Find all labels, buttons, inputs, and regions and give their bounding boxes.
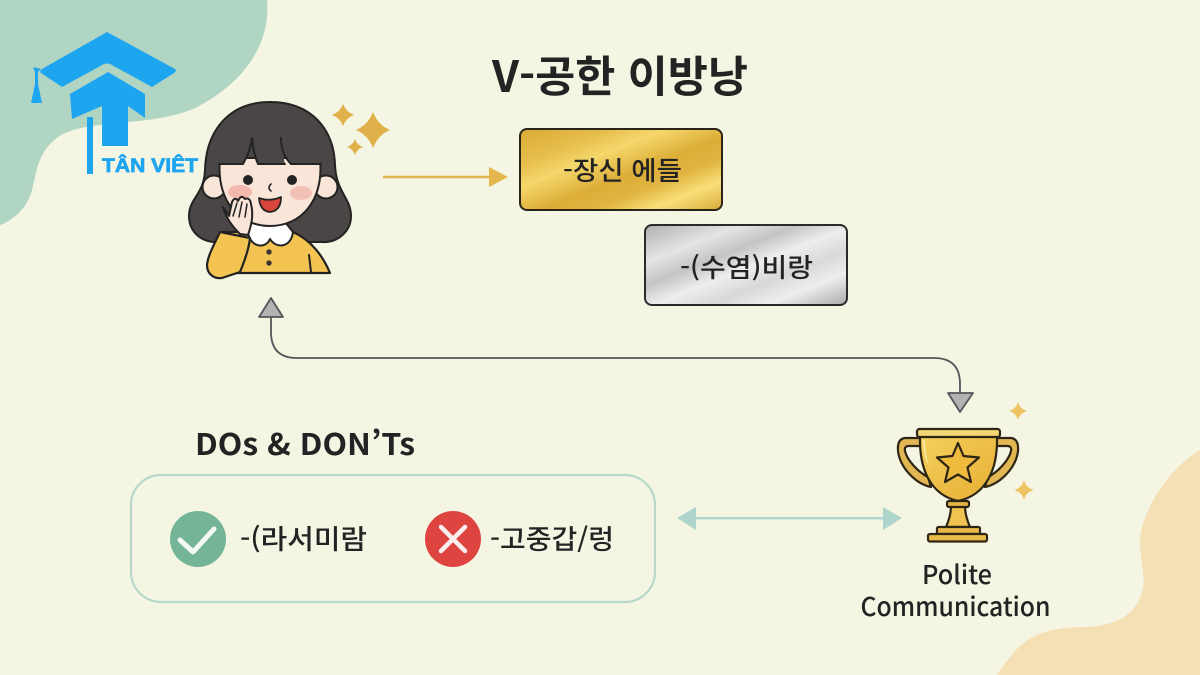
decorative peach blob xyxy=(997,450,1200,675)
face xyxy=(220,158,320,226)
trophy base xyxy=(937,527,980,534)
logo tassel xyxy=(31,67,42,103)
sparkles near girl xyxy=(332,104,390,155)
caption: Polite Communication xyxy=(860,555,1050,624)
silver label box: -(수염)비랑 xyxy=(680,248,813,285)
logo cap xyxy=(40,32,176,87)
trophy star xyxy=(937,443,979,482)
text: do: -(라서미람 xyxy=(240,518,367,557)
ears xyxy=(202,176,338,198)
icon: trophy xyxy=(898,429,1018,542)
cheeks xyxy=(228,185,252,199)
mouth xyxy=(259,197,281,212)
logo text: TÂN VIÊT xyxy=(102,155,198,177)
heading: DOs and DON'Ts: DOs & DON’Ts xyxy=(195,420,415,464)
sweater xyxy=(215,232,330,273)
nose xyxy=(269,184,271,191)
gold label box xyxy=(520,129,722,210)
bangs xyxy=(219,112,321,164)
sweater fold xyxy=(309,255,311,272)
icon: cross xyxy=(425,511,481,567)
logo arrow xyxy=(70,72,145,146)
title: V-공한 이방낭 xyxy=(491,43,748,105)
hair back xyxy=(189,102,351,242)
sleeve xyxy=(207,232,250,278)
character: girl xyxy=(189,102,351,278)
collar xyxy=(248,222,293,246)
decorative green blob xyxy=(0,0,267,225)
logo bar xyxy=(87,117,93,174)
icon: check xyxy=(170,511,226,567)
trophy rim xyxy=(917,429,1000,437)
double arrow xyxy=(677,507,902,530)
sparkles near trophy xyxy=(1009,402,1034,500)
gold label box: -장신 에들 xyxy=(563,151,682,188)
text: don't: -고중갑/렁 xyxy=(490,518,614,557)
connector arrow: girl and trophy xyxy=(259,298,973,412)
silver label box xyxy=(645,225,847,305)
caption: Polite Communication: Communication xyxy=(860,587,1050,624)
logo: Tan Viet xyxy=(31,32,198,177)
caption: Polite Communication: Polite xyxy=(922,555,992,592)
arrow: girl to gold box xyxy=(383,167,508,187)
hand xyxy=(223,197,252,235)
trophy highlight xyxy=(923,440,933,474)
trophy cup xyxy=(920,436,997,501)
panel: dos and don'ts xyxy=(131,475,655,602)
trophy handles xyxy=(898,438,931,487)
buttons xyxy=(266,249,272,255)
eyes xyxy=(243,175,253,185)
trophy stem xyxy=(946,506,970,527)
